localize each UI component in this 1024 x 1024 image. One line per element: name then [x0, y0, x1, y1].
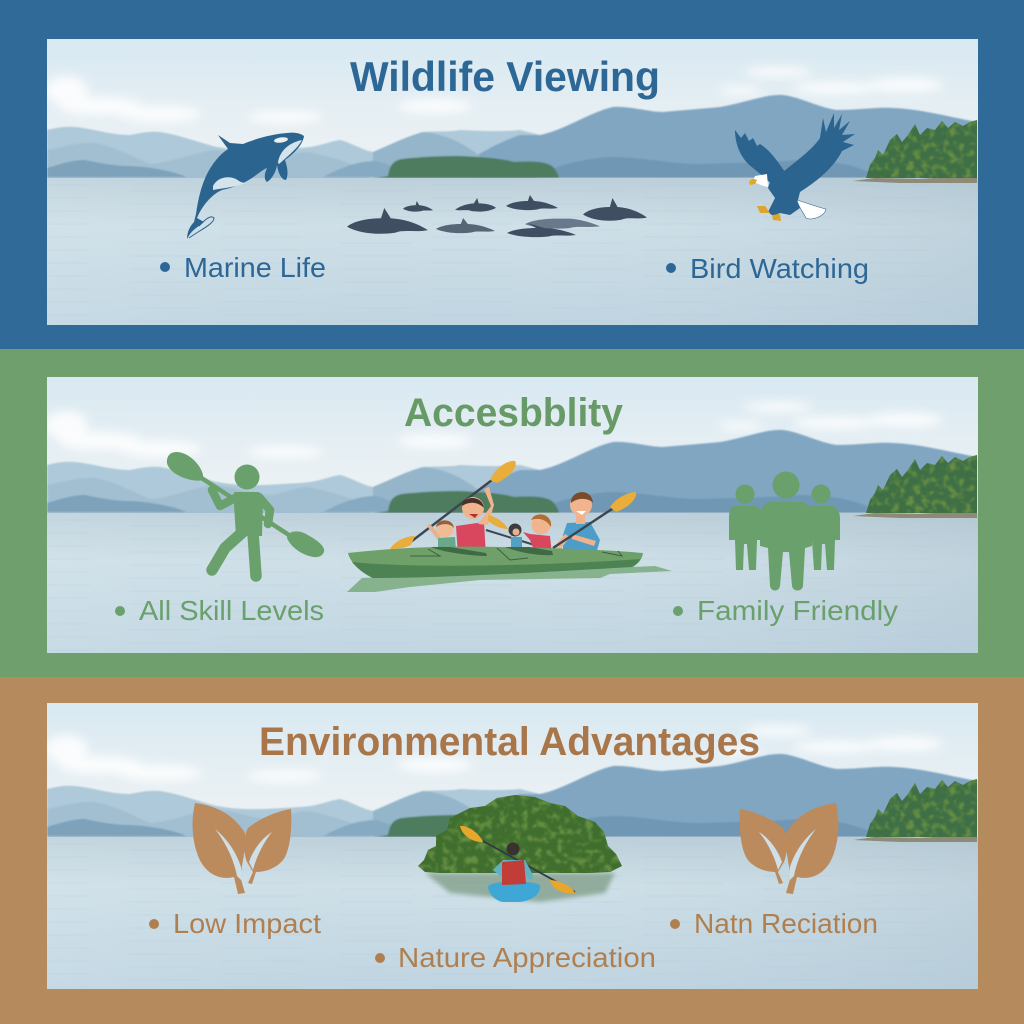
bullet: low impact: Low Impact [173, 908, 321, 939]
panel: accessibility [0, 349, 1024, 677]
mangrove island [418, 795, 622, 873]
parent right [553, 492, 600, 554]
orca pod [347, 195, 647, 237]
heading: accessibility: Accesbblity [404, 391, 624, 435]
child left [427, 520, 456, 550]
bullet: marine life: Marine Life [184, 252, 326, 283]
kayaker from behind [460, 826, 575, 902]
bullet: family friendly: Family Friendly [697, 595, 898, 626]
green hull [348, 547, 643, 578]
panel: wildlife viewing [47, 39, 978, 325]
icon: kayaker silhouette [167, 452, 324, 576]
bullet: natn reciation: Natn Reciation [694, 908, 878, 939]
middle paddle [486, 515, 585, 567]
icon: leaping orca [187, 133, 304, 239]
kayak with family [347, 461, 672, 592]
reflection [347, 566, 672, 592]
child right [523, 514, 552, 554]
icon: bald eagle [735, 113, 855, 221]
heading: environmental advantages: Environmental Advantages [259, 720, 760, 764]
island tree reflection [425, 873, 615, 902]
icon: family group [729, 472, 840, 590]
icon: right leaves [740, 803, 838, 894]
scenic photo background [47, 377, 978, 653]
scenic photo background [44, 689, 978, 997]
bullet: all skill levels: All Skill Levels [139, 595, 324, 626]
bullet: bird watching: Bird Watching [690, 253, 869, 284]
small child [508, 524, 522, 552]
bullet: nature appreciation: Nature Appreciation [398, 942, 656, 973]
panel: environmental advantages [0, 677, 1024, 1024]
parent left [456, 487, 494, 556]
heading: wildlife viewing: Wildlife Viewing [350, 53, 660, 100]
right paddle [553, 492, 636, 548]
icon: left leaves [193, 803, 291, 894]
scenic photo background [44, 30, 978, 338]
left paddle [390, 461, 516, 549]
